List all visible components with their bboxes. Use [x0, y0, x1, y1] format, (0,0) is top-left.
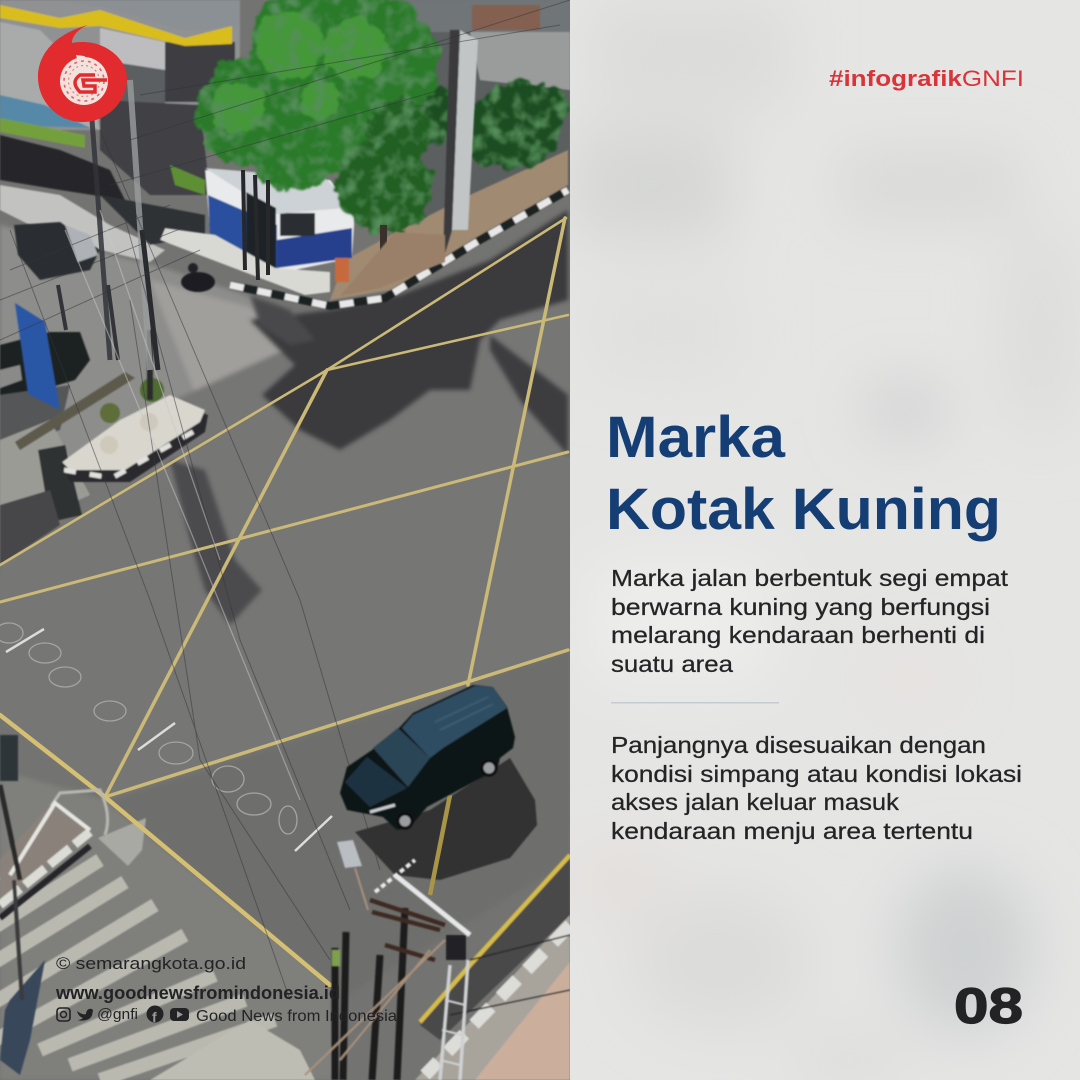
- logo badge: [38, 25, 127, 122]
- blue sign board: [15, 303, 60, 410]
- tree shadow on road: [170, 210, 568, 625]
- soft blurred shapes: [572, 28, 1040, 1038]
- white G emblem: [60, 55, 108, 105]
- icon: instagram: [57, 1008, 70, 1021]
- text block: length note: kendaraan menju area tertentu: [611, 818, 973, 844]
- icon: youtube: [170, 1008, 189, 1021]
- hashtag: #infografik GNFI: [829, 66, 1024, 91]
- title: [606, 405, 1001, 542]
- icon: twitter: [77, 1009, 93, 1021]
- text block: definition: Marka jalan berbentuk segi empat: [611, 565, 1009, 591]
- channel name: Good News from Indonesia: [196, 1008, 397, 1025]
- text block: length note: [611, 732, 1022, 844]
- crossing island: [0, 735, 108, 1075]
- social media row: [56, 1006, 397, 1022]
- police post building: [160, 168, 355, 295]
- sunlit street at upper left: [0, 225, 331, 1079]
- text block: definition: melarang kendaraan berhenti di: [611, 622, 985, 648]
- text block: length note: Panjangnya disesuaikan dengan: [611, 732, 986, 758]
- black car: [340, 685, 537, 895]
- dark van and left pavement: [0, 222, 100, 565]
- twitter handle: @gnfi: [97, 1006, 138, 1023]
- title line 2: Kotak Kuning: [606, 477, 1001, 542]
- text block: length note: akses jalan keluar masuk: [611, 789, 900, 815]
- far corner road, kerb and pavement: [415, 855, 570, 1080]
- painted pedestrian circles and white ticks: [0, 623, 332, 851]
- crosswalk: [0, 818, 315, 1080]
- icon: facebook: f: [152, 1009, 157, 1025]
- icon: facebook: [146, 1006, 164, 1022]
- car body: [340, 685, 515, 830]
- text block: definition: [611, 565, 1009, 677]
- pavement and kerb at junction corner: [230, 150, 568, 306]
- top-left buildings and yellow roof: [0, 0, 570, 230]
- panel: aerial photo of intersection: [0, 0, 570, 1080]
- photo credit: © semarangkota.go.id: [56, 954, 246, 973]
- page number: 08: [954, 978, 1023, 1034]
- arrow on road: [98, 818, 146, 866]
- parked motorcycles: [0, 135, 205, 262]
- foreground street poles and lamp: [305, 840, 470, 1080]
- panel: blurred content background: [570, 0, 1080, 1080]
- trees: [196, 0, 568, 280]
- red circle with tail: [38, 25, 127, 122]
- traffic island with planter: [15, 330, 208, 482]
- text block: definition: suatu area: [611, 651, 733, 677]
- car shadow: [355, 758, 537, 880]
- motorcycle: [181, 263, 215, 292]
- utility poles and wires left: [0, 0, 570, 1000]
- tall pole near tree: [340, 30, 478, 296]
- yellow line inside shadow: [430, 795, 450, 895]
- text block: definition: berwarna kuning yang berfungsi: [611, 594, 990, 620]
- title line 1: Marka: [606, 405, 786, 470]
- website url: www.goodnewsfromindonesia.id: [55, 983, 340, 1003]
- text block: length note: kondisi simpang atau kondisi lokasi: [611, 761, 1022, 787]
- yellow box junction lines: [0, 218, 568, 985]
